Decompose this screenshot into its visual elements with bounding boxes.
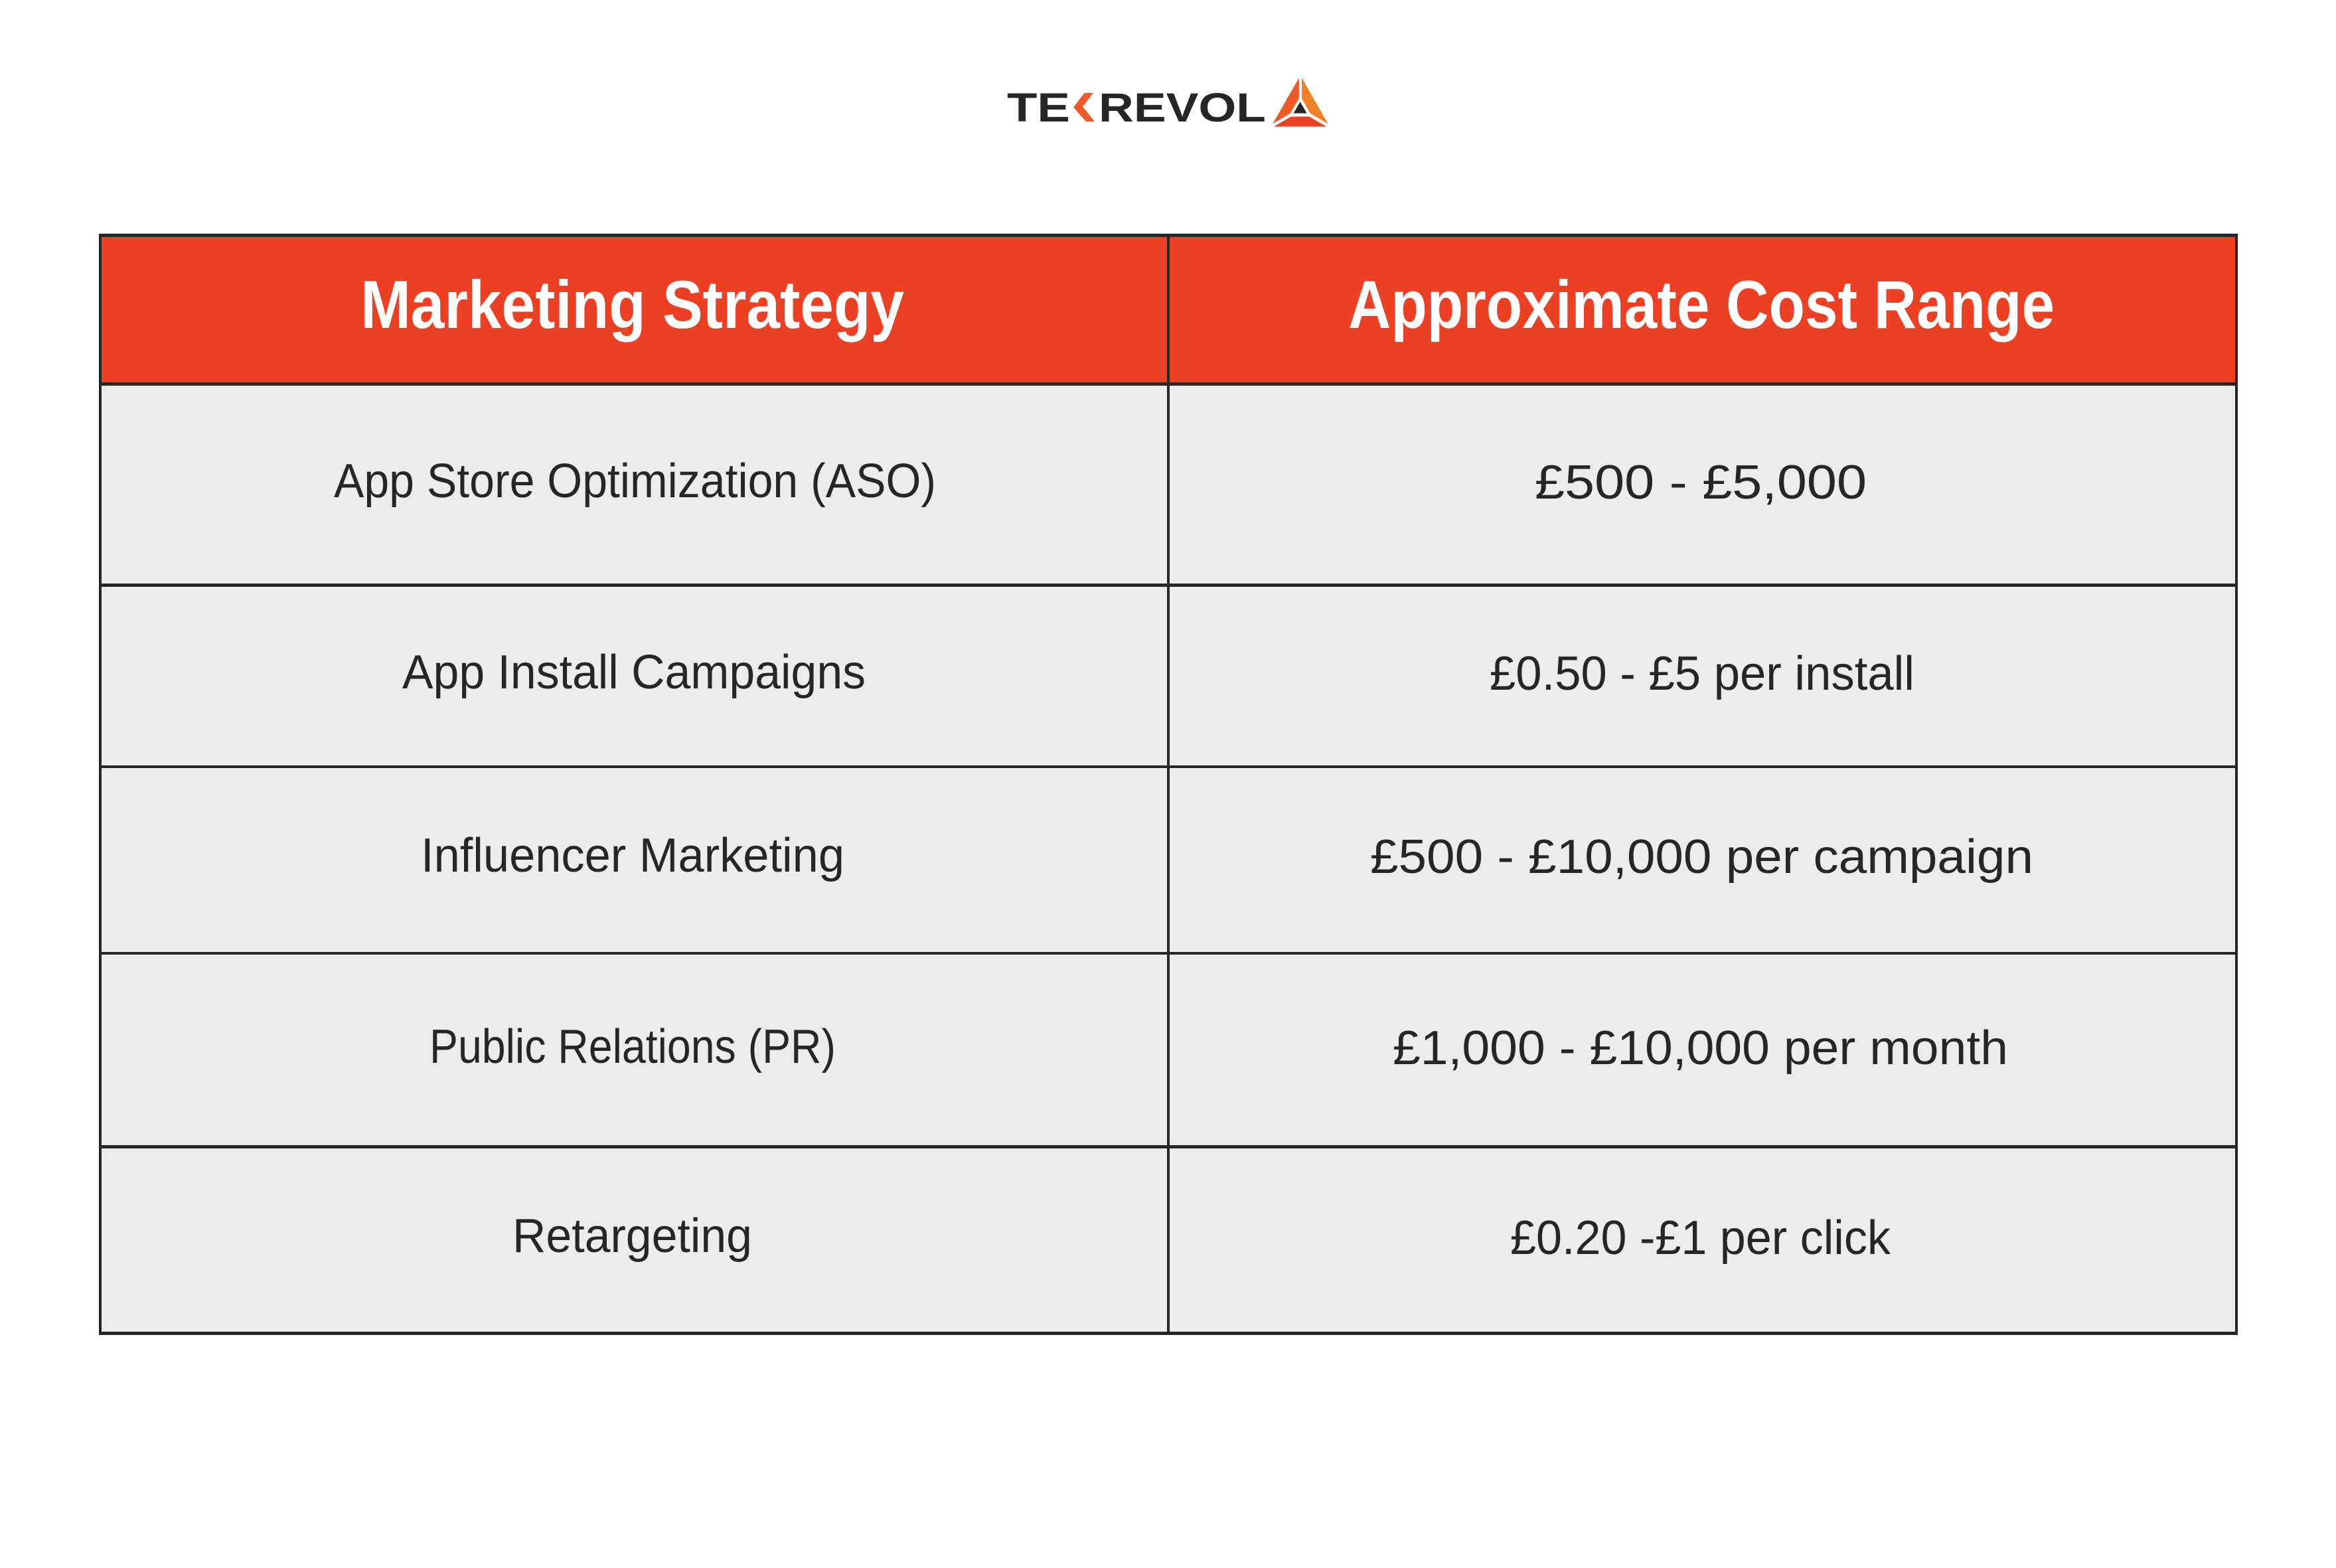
row 4 strategy: Public Relations (PR)	[429, 1020, 836, 1073]
row 1 strategy: App Store Optimization (ASO)	[334, 455, 936, 508]
logo: TekRevol	[1007, 78, 1328, 130]
heading: Marketing Strategy: Marketing Strategy	[360, 267, 904, 343]
logo chevron	[1073, 93, 1095, 121]
body rows background	[100, 384, 2236, 1332]
logo triangle icon	[1273, 78, 1328, 127]
row 5 strategy: Retargeting	[512, 1210, 752, 1263]
header row background	[100, 235, 2236, 384]
row 3 strategy: Influencer Marketing	[421, 829, 844, 882]
row 4 cost: £1,000 - £10,000 per month	[1393, 1022, 2008, 1075]
logo wordmark start: TE	[1007, 85, 1070, 130]
row 2 strategy: App Install Campaigns	[402, 646, 866, 699]
row 2 cost: £0.50 - £5 per install	[1490, 647, 1914, 700]
heading: Approximate Cost Range: Approximate Cost Range	[1348, 267, 2055, 343]
table	[99, 234, 2238, 1335]
table grid lines	[99, 234, 2238, 1335]
row 3 cost: £500 - £10,000 per campaign	[1370, 830, 2033, 884]
row 5 cost: £0.20 -£1 per click	[1510, 1212, 1891, 1265]
row 1 cost: £500 - £5,000	[1535, 456, 1867, 509]
logo wordmark end: REVOL	[1099, 85, 1266, 130]
